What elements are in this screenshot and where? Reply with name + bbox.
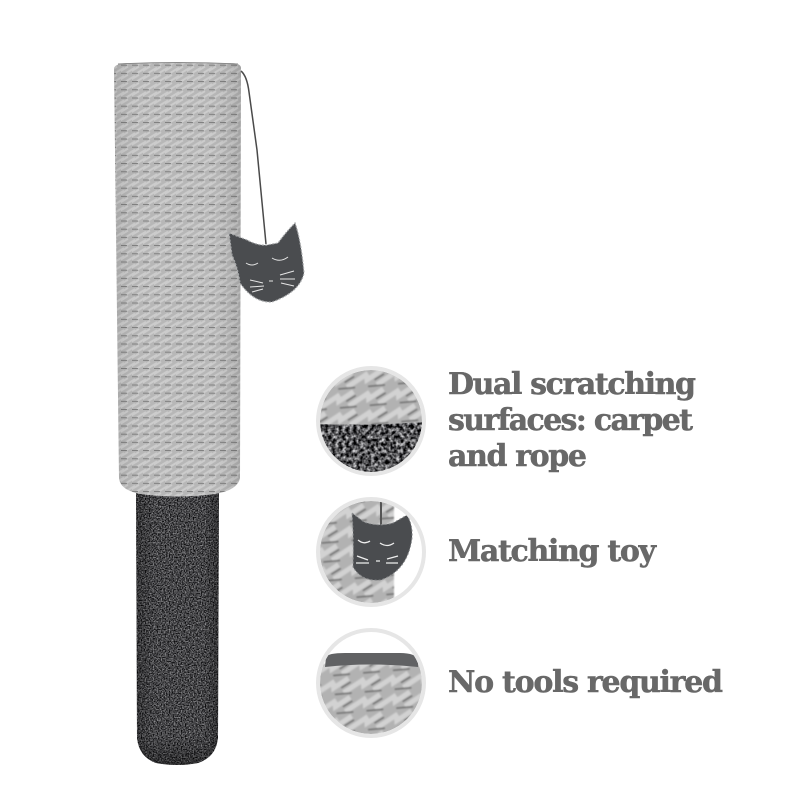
- feature: no tools required: [318, 628, 723, 738]
- detail circle: toy: [318, 497, 424, 607]
- carpet base section: [136, 490, 219, 765]
- detail circle: rope over carpet: [318, 368, 424, 476]
- heading: dual scratching surfaces: Dual scratching: [448, 367, 696, 402]
- scratching post: [114, 62, 241, 765]
- feature: carpet and rope detail: [318, 367, 696, 476]
- heading: dual scratching surfaces: [448, 367, 696, 474]
- feature: matching toy: [318, 497, 658, 607]
- icon: cat face toy: [229, 223, 304, 302]
- toy string: [241, 71, 266, 244]
- heading: dual scratching surfaces: and rope: [448, 439, 587, 474]
- detail circle: post top: [318, 628, 424, 738]
- heading: no tools required: No tools required: [448, 665, 723, 700]
- heading: dual scratching surfaces: surfaces: carpet: [448, 403, 693, 438]
- heading: matching toy: Matching toy: [448, 534, 658, 569]
- rope covered section: [114, 62, 241, 496]
